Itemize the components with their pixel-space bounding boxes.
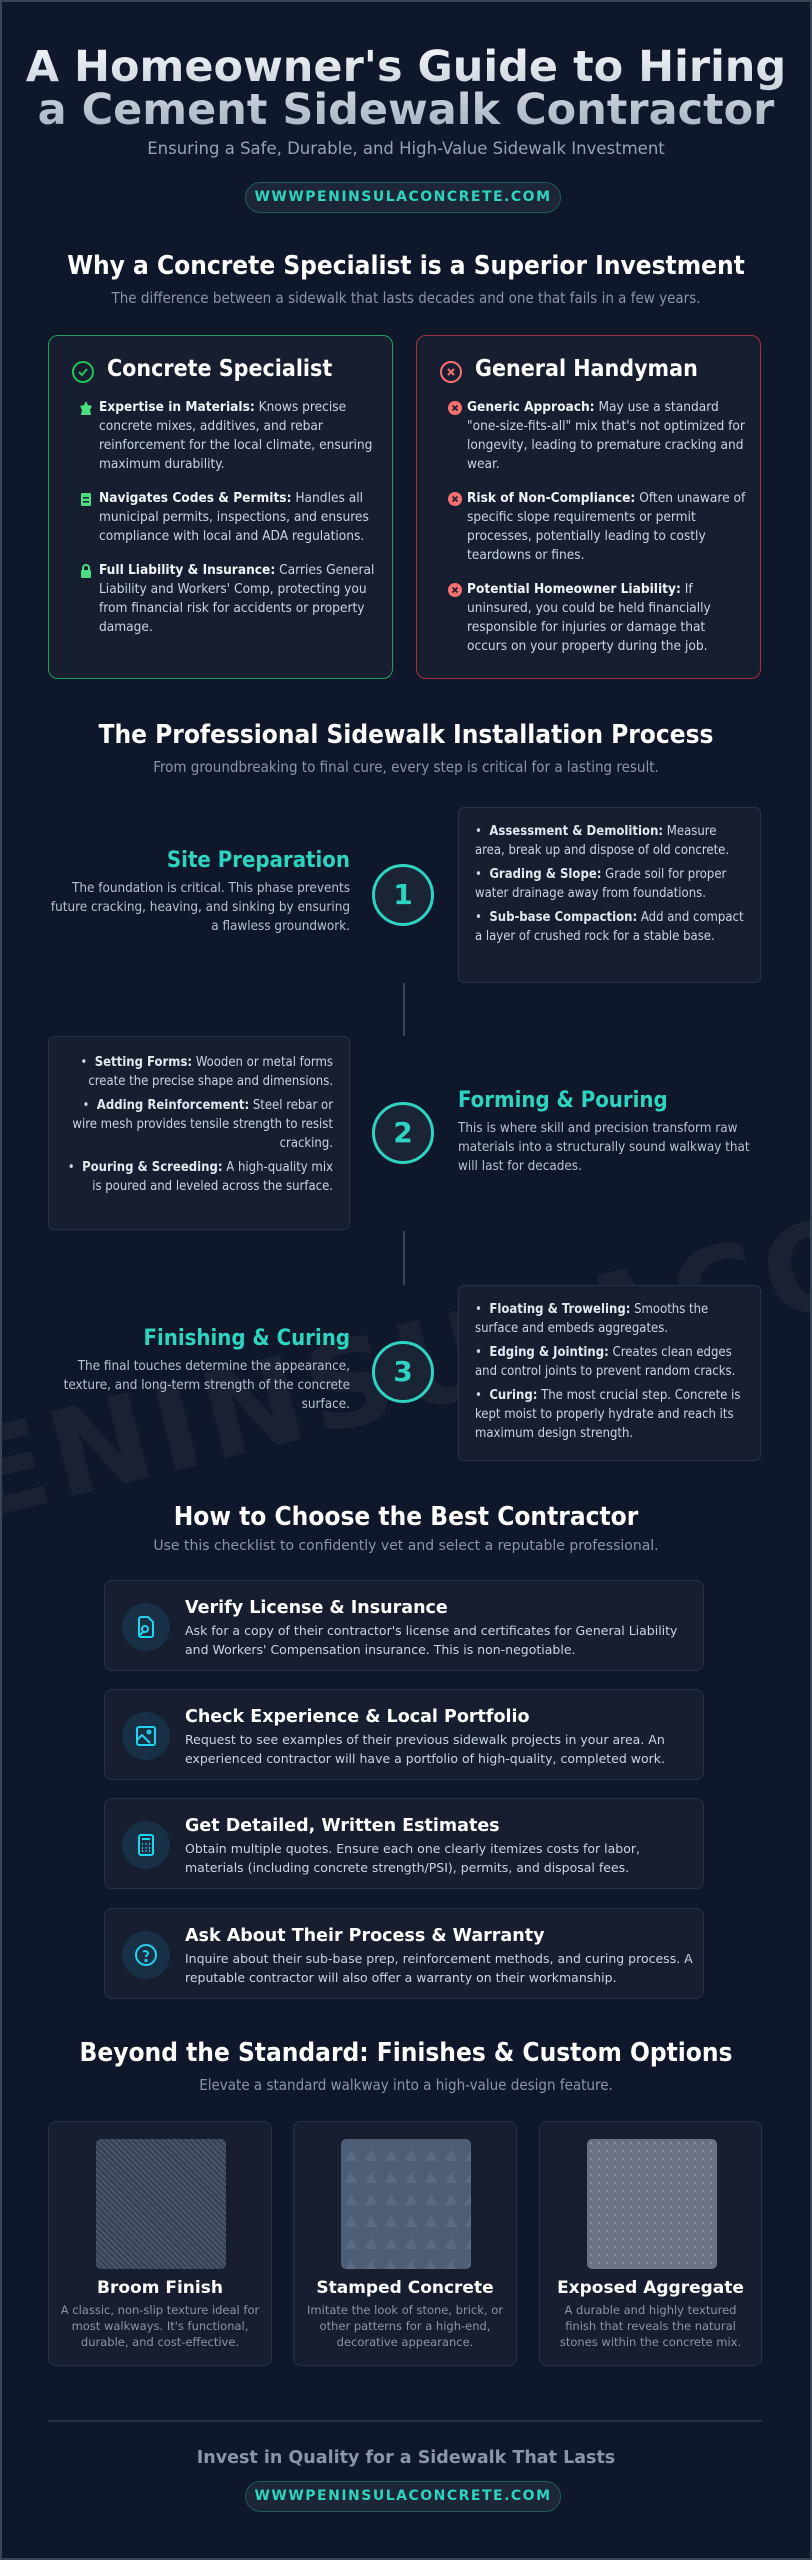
step 1 details	[458, 807, 761, 983]
finish card: stamped: Imitate the look of stone, brick, or other patterns for a high-end, decorative appearance.	[307, 2303, 503, 2349]
title: a Cement Sidewalk Contractor	[38, 85, 774, 135]
step 2 details: • Setting Forms: Wooden or metal forms create the precise shape and dimensions.	[80, 1055, 333, 1089]
step 3 details	[458, 1285, 761, 1461]
checklist: portfolio: Request to see examples of their previous sidewalk projects in your area. An experienced contractor will have a portfolio of high-quality, completed work.	[185, 1732, 665, 1766]
item: non-compliance: Risk of Non-Compliance: Often unaware of specific slope requirements or permit processes, potentially leading to costly teardowns or fines.	[467, 490, 745, 563]
step 3 number: 3	[393, 1355, 413, 1388]
step 2 number	[372, 1102, 434, 1164]
item: liability: Full Liability & Insurance: Carries General Liability and Workers' Comp, protecting you from financial risk for accidents or property damage.	[99, 562, 374, 635]
finish card: broom	[48, 2121, 272, 2366]
subheading finishes: Elevate a standard walkway into a high-value design feature.	[199, 2076, 613, 2094]
heading: process: The Professional Sidewalk Installation Process	[99, 720, 713, 750]
item: generic: Generic Approach: May use a standard "one-size-fits-all" mix that's not optimized for longevity, leading to premature cracking and wear.	[467, 399, 745, 472]
finish card: stamped	[293, 2121, 517, 2366]
panel: concrete specialist: Concrete Specialist	[107, 356, 332, 382]
step 2 text	[458, 1088, 750, 1174]
checklist: warranty: Ask About Their Process & Warranty	[185, 1926, 544, 1946]
icon: check circle	[72, 361, 94, 383]
website pill bottom: WWWPENINSULACONCRETE.COM	[254, 2488, 552, 2504]
heading: choose contractor: How to Choose the Best Contractor	[174, 1502, 638, 1532]
step 2 details: • Pouring & Screeding: A high-quality mix is poured and leveled across the surface.	[68, 1160, 333, 1194]
item: homeowner liability: Potential Homeowner Liability: If uninsured, you could be held financially responsible for injuries or damage that occurs on your property during the job.	[467, 581, 711, 654]
step 3 details: • Edging & Jointing: Creates clean edges and control joints to prevent random cracks.	[475, 1345, 735, 1379]
step 1 text	[51, 848, 350, 934]
subtitle: Ensuring a Safe, Durable, and High-Value Sidewalk Investment	[147, 139, 665, 158]
title	[26, 42, 786, 135]
step 1 text: The foundation is critical. This phase prevents future cracking, heaving, and sinking by ensuring a flawless groundwork.	[51, 881, 350, 934]
checklist: warranty	[104, 1908, 704, 1999]
checklist: license: Ask for a copy of their contractor's license and certificates for General Liability and Workers' Compensation insurance. This is non-negotiable.	[185, 1623, 677, 1657]
subheading choose: Use this checklist to confidently vet and select a reputable professional.	[153, 1538, 659, 1554]
website pill bottom	[245, 2481, 561, 2512]
step 1 number	[372, 864, 434, 926]
step 1 text: Site Preparation	[167, 848, 350, 873]
step 2 details: • Adding Reinforcement: Steel rebar or wire mesh provides tensile strength to resist cracking.	[72, 1098, 333, 1151]
step 1 details: • Sub-base Compaction: Add and compact a layer of crushed rock for a stable base.	[475, 910, 744, 944]
checklist: estimates: Get Detailed, Written Estimates	[185, 1816, 500, 1836]
subheading: The difference between a sidewalk that lasts decades and one that fails in a few years.	[111, 289, 701, 307]
subheading process: From groundbreaking to final cure, every step is critical for a lasting result.	[153, 758, 659, 776]
step 3 details: • Floating & Troweling: Smooths the surface and embeds aggregates.	[475, 1302, 708, 1336]
title: A Homeowner's Guide to Hiring	[26, 42, 786, 92]
finish card: aggregate: Exposed Aggregate	[557, 2278, 744, 2298]
step 3 number	[372, 1341, 434, 1403]
panel: general handyman: General Handyman	[475, 356, 698, 382]
footer text: Invest in Quality for a Sidewalk That Lasts	[197, 2448, 615, 2468]
checklist: portfolio	[104, 1689, 704, 1780]
icon: x circle	[440, 361, 462, 383]
item: codes: Navigates Codes & Permits: Handles all municipal permits, inspections, and ensures compliance with local and ADA regulations.	[99, 490, 369, 544]
finish card: stamped: Stamped Concrete	[316, 2278, 494, 2298]
step 1 details: • Assessment & Demolition: Measure area, break up and dispose of old concrete.	[475, 824, 729, 858]
item: expertise: Expertise in Materials: Knows precise concrete mixes, additives, and rebar reinforcement for the local climate, ensuring maximum durability.	[99, 399, 372, 472]
step 1 details: • Grading & Slope: Grade soil for proper water drainage away from foundations.	[475, 867, 726, 901]
finish card: broom: Broom Finish	[97, 2278, 223, 2298]
panel: concrete specialist	[48, 335, 393, 679]
finish card: aggregate: A durable and highly textured finish that reveals the natural stones within the concrete mix.	[560, 2303, 741, 2349]
checklist: portfolio: Check Experience & Local Portfolio	[185, 1707, 530, 1727]
step 2 text: This is where skill and precision transform raw materials into a structurally sound walkway that will last for decades.	[458, 1121, 750, 1174]
checklist: warranty: Inquire about their sub-base prep, reinforcement methods, and curing process. A reputable contractor will also offer a warranty on their workmanship.	[185, 1951, 693, 1985]
panel: general handyman	[416, 335, 761, 679]
step 3 text: Finishing & Curing	[143, 1326, 350, 1351]
step 3 details: • Curing: The most crucial step. Concrete is kept moist to properly hydrate and reach its maximum design strength.	[475, 1388, 740, 1441]
step 2 number: 2	[393, 1116, 413, 1149]
step 1 number: 1	[393, 878, 413, 911]
heading: why specialist: Why a Concrete Specialist is a Superior Investment	[67, 251, 745, 281]
heading: finishes: Beyond the Standard: Finishes & Custom Options	[80, 2038, 732, 2068]
step 3 text: The final touches determine the appearance, texture, and long-term strength of the concrete surface.	[64, 1359, 350, 1412]
checklist: estimates	[104, 1798, 704, 1889]
finish card: aggregate	[539, 2121, 762, 2366]
checklist: license: Verify License & Insurance	[185, 1598, 448, 1618]
step 2 details	[48, 1036, 350, 1230]
website pill top: WWWPENINSULACONCRETE.COM	[254, 189, 552, 205]
checklist: estimates: Obtain multiple quotes. Ensure each one clearly itemizes costs for labor, materials (including concrete strength/PSI), permits, and disposal fees.	[185, 1841, 640, 1875]
step 3 text	[64, 1326, 350, 1412]
checklist: license	[104, 1580, 704, 1671]
website pill top	[245, 182, 561, 213]
step 2 text: Forming & Pouring	[458, 1088, 668, 1113]
finish card: broom: A classic, non-slip texture ideal for most walkways. It's functional, durable, and cost-effective.	[61, 2303, 259, 2349]
